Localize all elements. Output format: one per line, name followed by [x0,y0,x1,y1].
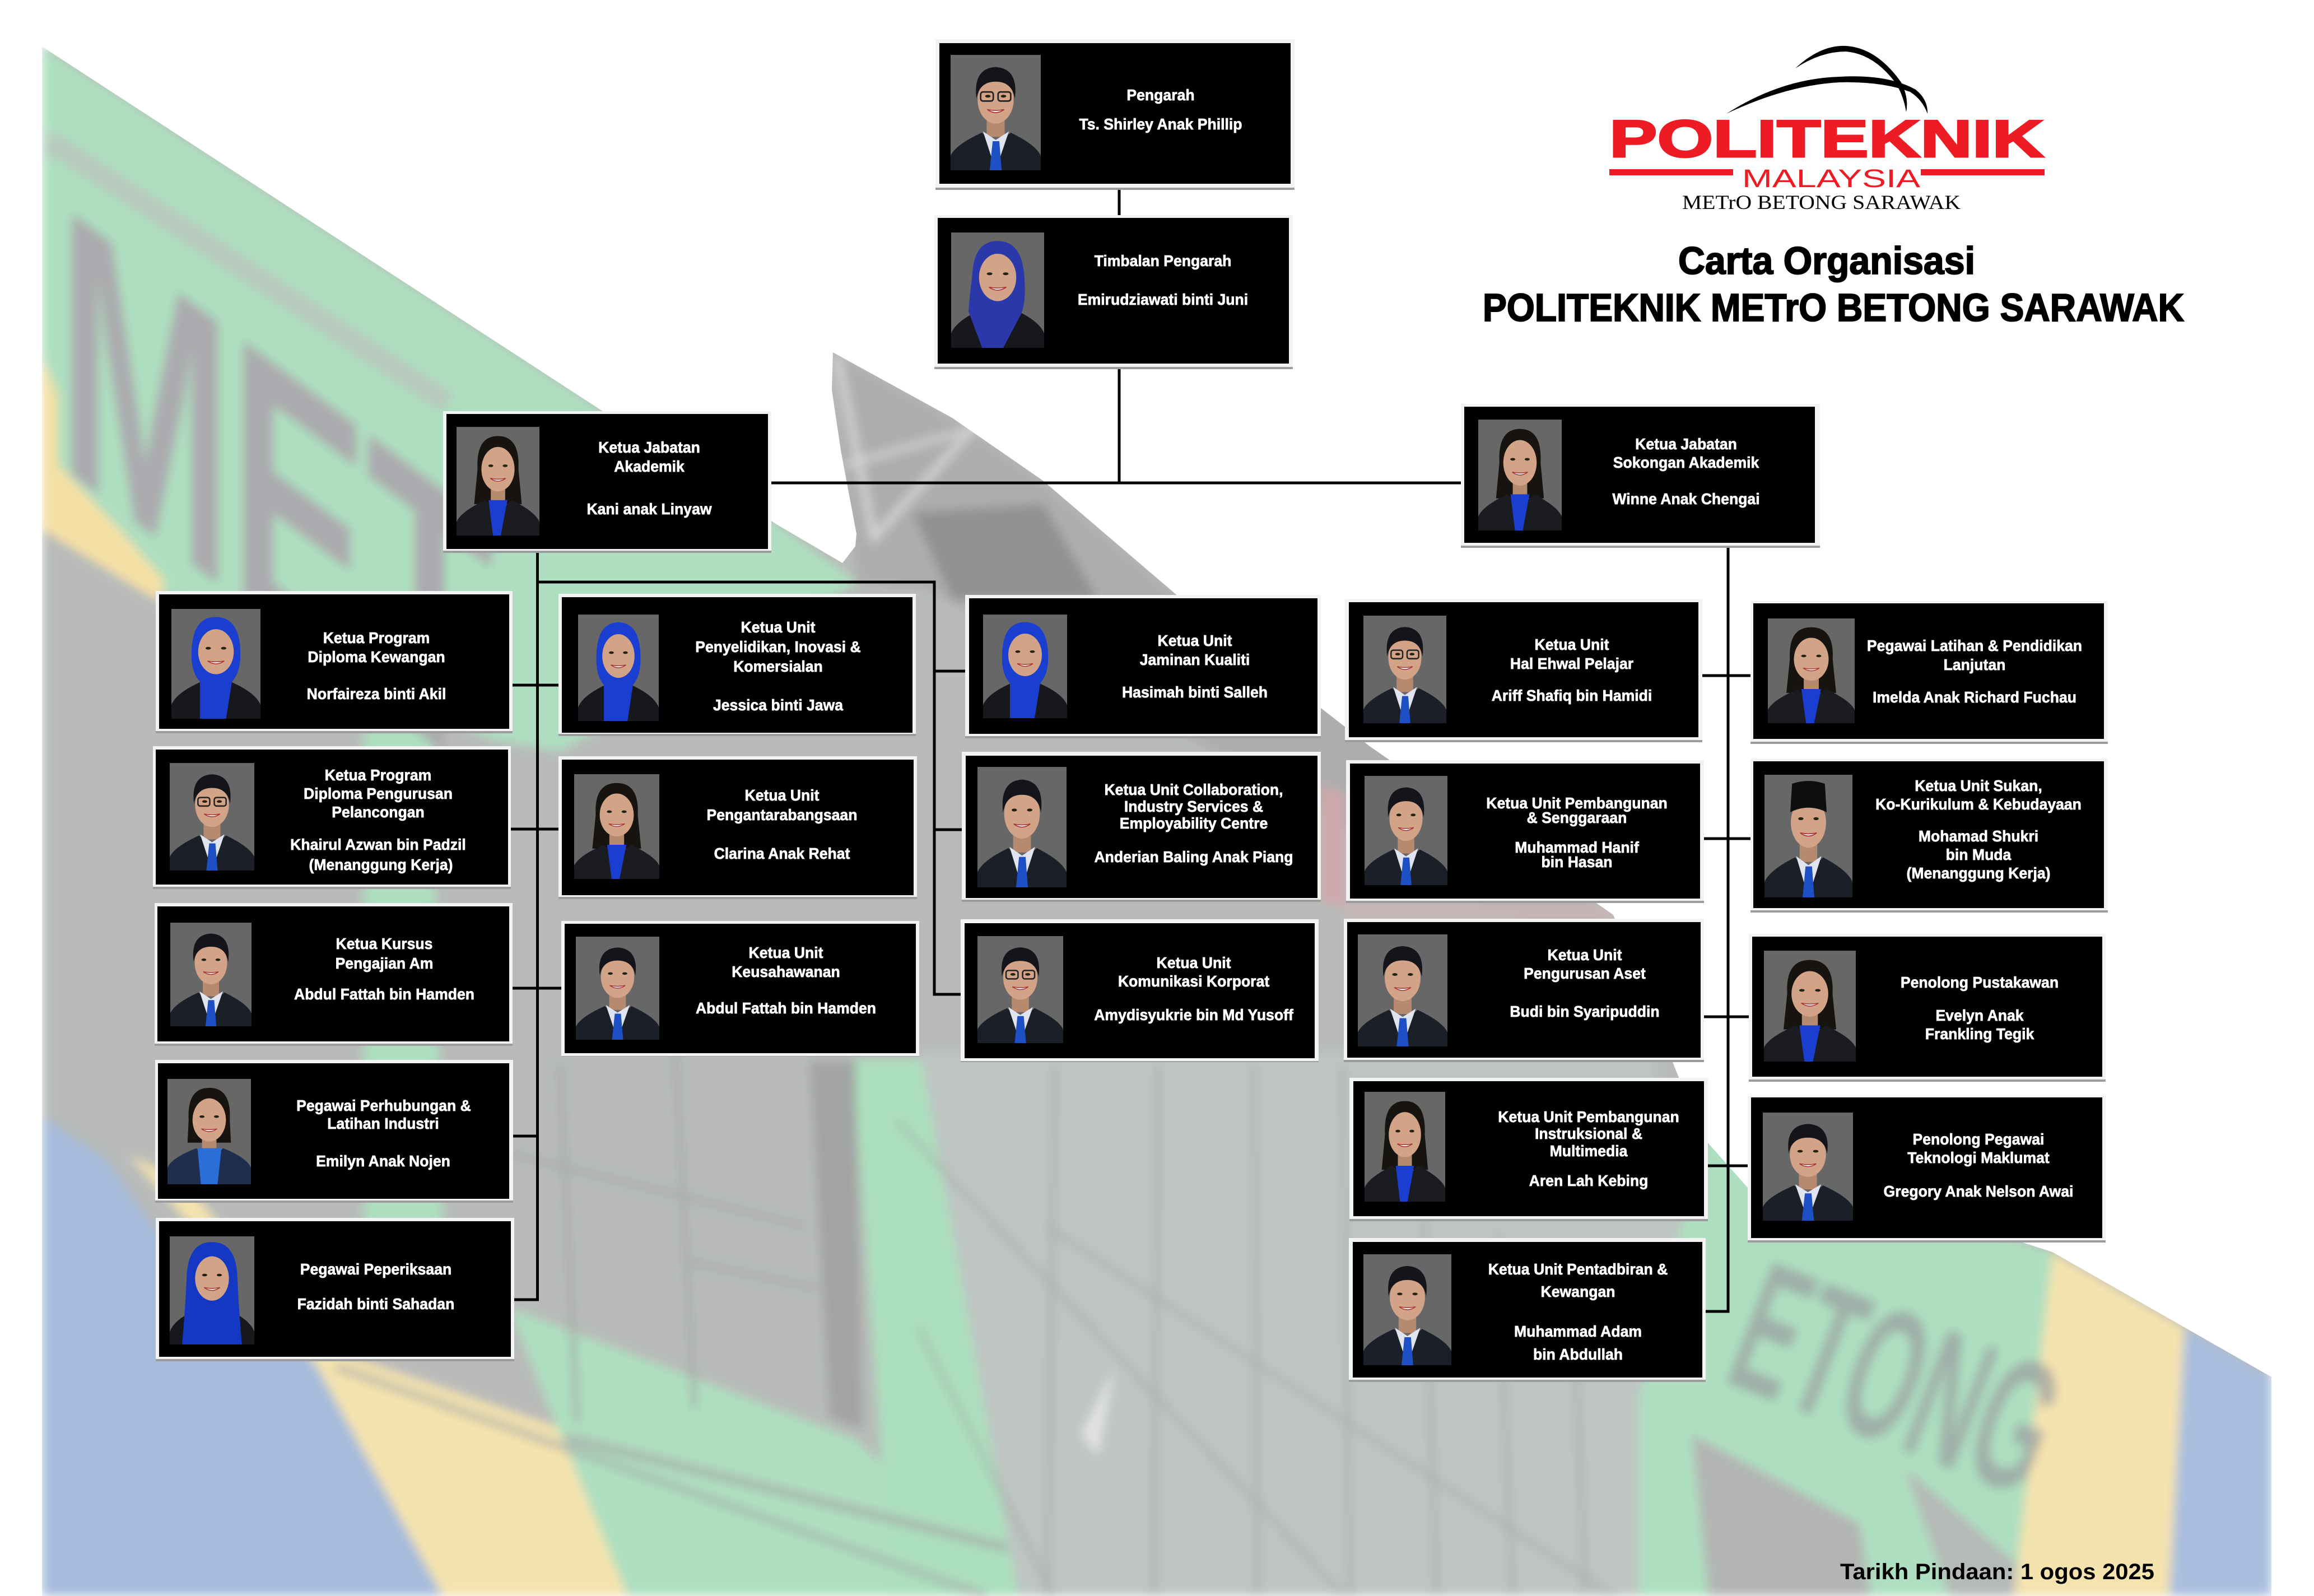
text: Ketua Unit Pembangunan & Senggaraan: bin Hasan [1541,853,1613,871]
text: Ketua Unit Pengurusan Aset: Pengurusan Aset [1524,964,1646,982]
text: Ketua Unit Penyelidikan: Jessica binti Jawa [713,696,844,714]
card: Pegawai Perhubungan & Latihan Industri [155,1060,513,1203]
photo: Imelda [1768,618,1855,723]
text: Ketua Unit Pembangunan Instruksional: Instruksional & [1535,1124,1642,1142]
text: Ketua Unit Pembangunan & Senggaraan: & Senggaraan [1527,808,1627,826]
text: Ketua Unit Komunikasi Korporat: Ketua Unit [1157,953,1231,971]
text: Pegawai Perhubungan [296,1096,471,1170]
card: Ketua Unit Komunikasi Korporat [961,919,1319,1062]
text: Timbalan Pengarah: Emirudziawati binti Juni [1078,290,1248,308]
photo: Hanif [1365,776,1447,885]
text: Ketua Unit Pembangunan Instruksional: Ketua Unit Pembangunan [1498,1108,1679,1125]
logo rule right [1921,169,2045,175]
logo campus name: METrO BETONG SARAWAK [1682,191,1961,213]
text: Ketua Program Pelancongan: Khairul Azwan bin Padzil [290,835,466,853]
card: Ketua Jabatan Sokongan Akademik [1461,404,1820,548]
photo: Abdul Fattah [170,923,252,1026]
text: Ketua Unit Pembangunan Instruksional: Multimedia [1550,1142,1628,1160]
text: Ketua Unit Jaminan Kualiti [1122,631,1268,701]
text: Ketua Program Diploma Kewangan [307,629,446,702]
text: Pengarah [1079,86,1242,133]
text: Penolong Pegawai Teknologi Maklumat [1884,1130,2073,1200]
text: Pegawai Peperiksaan [297,1260,454,1313]
text: Ketua Unit Collaboration: Industry Services & [1124,797,1263,815]
text: Penolong Pegawai Teknologi Maklumat: Penolong Pegawai [1913,1130,2044,1148]
photo: Amydisyukrie [977,936,1063,1043]
text: Penolong Pustakawan: Evelyn Anak [1935,1006,2024,1024]
text: Ketua Jabatan Akademik [586,438,712,518]
text: Ketua Jabatan Akademik: Akademik [614,457,685,475]
background lettering on the building, right: ETONG [1706,1222,2087,1535]
text: Pegawai Perhubungan: Pegawai Perhubungan & [296,1096,471,1114]
text: Pegawai Latihan & Pendidikan Lanjutan: Pegawai Latihan & Pendidikan [1867,636,2082,654]
text: Ketua Jabatan Akademik: Kani anak Linyaw [586,500,712,518]
text: Ketua Jabatan Sokongan Akademik [1612,435,1760,508]
card: Ketua Unit Pembangunan Instruksional [1349,1078,1708,1221]
text: Ketua Unit Hal Ehwal Pelajar: Ketua Unit [1535,635,1609,653]
logo subtitle: MALAYSIA [1742,164,1920,193]
text: Ketua Unit Hal Ehwal Pelajar: Ariff Shafiq bin Hamidi [1492,686,1652,704]
text: Ketua Unit Pembangunan & Senggaraan: Ketua Unit Pembangunan [1486,794,1668,812]
card: Ketua Unit Pentadbiran & Kewangan [1349,1238,1706,1382]
card: Ketua Unit Pembangunan & Senggaraan [1346,760,1704,903]
text: Ketua Jabatan Sokongan Akademik: Winne Anak Chengai [1612,490,1760,508]
logo rule left [1609,169,1733,175]
photo: Clarina [574,774,659,879]
text: Pegawai Latihan & Pendidikan Lanjutan [1867,636,2082,706]
card: Penolong Pustakawan [1749,934,2106,1082]
card: Ketua Program Diploma Pengurusan Pelancongan [153,746,511,889]
background lettering on the building: MET [58,119,493,870]
text: Ketua Program Pelancongan: Diploma Pengurusan [304,784,453,802]
photo: Anderian [977,767,1067,887]
text: Ketua Unit Penyelidikan: Komersialan [733,657,823,675]
photo: Emirudziawati [951,232,1044,348]
card: Ketua Unit Keusahawanan [561,921,919,1057]
text: Pegawai Perhubungan: Latihan Industri [327,1114,439,1132]
text: Ketua Unit Pentadbiran & Kewangan: Muhammad Adam [1514,1322,1642,1340]
text: Ketua Unit Pentadbiran & Kewangan: Kewangan [1541,1282,1615,1300]
text: Pegawai Latihan & Pendidikan Lanjutan: Lanjutan [1944,655,2005,673]
text: Ketua Unit Penyelidikan: Ketua Unit [741,618,815,636]
photo: Ariff [1363,616,1446,723]
photo: Evelyn [1764,951,1856,1062]
text: Timbalan Pengarah [1078,252,1248,308]
card: Ketua Unit Jaminan Kualiti [965,595,1321,738]
title line 2: POLITEKNIK METrO BETONG SARAWAK [1483,286,2184,329]
text: Ketua Unit Komunikasi Korporat [1094,953,1294,1023]
text: Ketua Unit Keusahawanan [696,943,876,1017]
text: Ketua Unit Komunikasi Korporat: Komunikasi Korporat [1118,972,1269,990]
text: Ketua Jabatan Sokongan Akademik: Sokongan Akademik [1613,453,1759,471]
text: Ketua Unit Sukan: (Menanggung Kerja) [1906,864,2051,882]
text: Ketua Unit Hal Ehwal Pelajar: Hal Ehwal Pelajar [1510,654,1633,672]
photo: Budi [1358,934,1447,1046]
text: Ketua Unit Pentadbiran & Kewangan [1488,1260,1668,1363]
photo: Fazidah [170,1236,254,1344]
text: Ketua Unit Keusahawanan: Abdul Fattah bin Hamden [696,999,876,1017]
text: Ketua Unit Sukan: bin Muda [1946,845,2012,863]
text: Penolong Pustakawan [1901,973,2059,1043]
card: Pegawai Latihan & Pendidikan Lanjutan [1750,601,2108,744]
text: Ketua Unit Pembangunan Instruksional: Aren Lah Kebing [1529,1171,1648,1189]
text: Ketua Program Diploma Kewangan: Norfaireza binti Akil [307,685,446,702]
text: Ketua Unit Collaboration [1094,780,1293,866]
text: Ketua Program Pelancongan: Ketua Program [325,766,431,784]
text: Ketua Kursus Pengajian Am [294,934,474,1003]
text: Ketua Program Pelancongan: Pelancongan [332,803,425,821]
text: Ketua Unit Jaminan Kualiti: Jaminan Kualiti [1140,650,1250,668]
connector lines [511,188,1754,1311]
photo: Jessica [578,615,659,721]
text: Ketua Program Diploma Kewangan: Diploma Kewangan [308,648,445,666]
text: Pegawai Peperiksaan: Pegawai Peperiksaan [300,1260,451,1278]
text: Penolong Pustakawan: Frankling Tegik [1925,1025,2034,1043]
card: Ketua Jabatan Akademik [443,411,771,553]
text: Ketua Kursus Pengajian Am: Pengajian Am [336,954,433,972]
card: Ketua Unit Collaboration [962,752,1321,902]
text: Ketua Unit Penyelidikan [695,618,861,714]
text: Ketua Unit Pengantarabangsaan: Clarina Anak Rehat [714,844,850,862]
text: Ketua Kursus Pengajian Am: Abdul Fattah bin Hamden [294,985,474,1003]
text: Ketua Unit Jaminan Kualiti: Hasimah binti Salleh [1122,683,1268,701]
text: Ketua Unit Sukan: Ketua Unit Sukan, [1915,776,2042,794]
card: Pegawai Peperiksaan [156,1218,514,1361]
text: Ketua Unit Pembangunan & Senggaraan: Muhammad Hanif [1515,838,1640,856]
text: Ketua Unit Jaminan Kualiti: Ketua Unit [1158,631,1232,649]
text: Ketua Unit Penyelidikan: Penyelidikan, Inovasi & [695,638,861,655]
text: Ketua Unit Pengantarabangsaan: Ketua Unit [745,786,819,804]
card: Ketua Kursus Pengajian Am [155,903,513,1046]
text: Ketua Program Pelancongan [290,766,466,873]
card: Ketua Unit Hal Ehwal Pelajar [1345,599,1702,742]
text: Ketua Jabatan Akademik: Ketua Jabatan [598,438,700,456]
text: Ketua Unit Collaboration: Anderian Baling Anak Piang [1094,848,1293,866]
card: Ketua Unit Pengantarabangsaan [558,756,917,899]
logo wordmark: POLITEKNIK [1609,109,2044,168]
photo: Kani [457,427,539,536]
title line 1: Carta Organisasi [1678,239,1975,282]
text: Ketua Unit Pengurusan Aset [1510,946,1660,1020]
card: Ketua Program Diploma Kewangan [156,591,513,733]
card: Pengarah [935,39,1295,190]
text: Ketua Unit Pengantarabangsaan [707,786,857,862]
photo: Khairul [170,763,254,871]
text: Ketua Program Pelancongan: (Menanggung Kerja) [309,855,453,873]
card: Ketua Unit Pengurusan Aset [1344,919,1704,1062]
text: Ketua Unit Keusahawanan: Ketua Unit [749,943,823,961]
text: Ketua Unit Collaboration: Ketua Unit Collaboration, [1104,780,1283,798]
text: Ketua Unit Pengantarabangsaan: Pengantarabangsaan [707,806,857,823]
text: Ketua Unit Pentadbiran & Kewangan: bin Abdullah [1533,1345,1623,1363]
card: Penolong Pegawai Teknologi Maklumat [1748,1096,2106,1243]
text: Timbalan Pengarah: Timbalan Pengarah [1095,252,1231,269]
card: Ketua Unit Sukan, Ko-Kurikulum & Kebudayaan [1750,759,2108,913]
text: Ketua Unit Pentadbiran & Kewangan: Ketua Unit Pentadbiran & [1488,1260,1668,1278]
text: Ketua Program Diploma Kewangan: Ketua Program [323,629,430,646]
photo: Shirley [951,55,1041,170]
revision date: Tarikh Pindaan: 1 ogos 2025 [1840,1560,2154,1584]
text: Ketua Unit Komunikasi Korporat: Amydisyukrie bin Md Yusoff [1094,1006,1294,1023]
text: Ketua Unit Sukan: Mohamad Shukri [1919,827,2038,845]
text: Ketua Unit Sukan: Ko-Kurikulum & Kebudayaan [1875,795,2082,813]
card: Ketua Unit Penyelidikan [558,594,916,736]
text: Penolong Pegawai Teknologi Maklumat: Gregory Anak Nelson Awai [1884,1182,2073,1200]
photo: Adam [1363,1254,1451,1365]
text: Penolong Pustakawan: Penolong Pustakawan [1901,973,2059,991]
card: Timbalan Pengarah [934,215,1293,369]
text: Pengarah: Pengarah [1126,86,1195,104]
photo: Hasimah [983,615,1067,718]
photo: Norfaireza [171,609,260,719]
text: Ketua Unit Hal Ehwal Pelajar [1492,635,1652,704]
text: Ketua Unit Pembangunan Instruksional [1498,1108,1679,1189]
text: Pegawai Perhubungan: Emilyn Anak Nojen [316,1152,450,1170]
logo [1609,46,2045,213]
text: Pegawai Peperiksaan: Fazidah binti Sahadan [297,1295,454,1313]
title [1483,239,2184,329]
text: Pegawai Latihan & Pendidikan Lanjutan: Imelda Anak Richard Fuchau [1873,688,2076,706]
text: Ketua Unit Collaboration: Employability Centre [1120,814,1268,832]
text: Ketua Unit Keusahawanan: Keusahawanan [732,962,840,980]
text: Ketua Jabatan Sokongan Akademik: Ketua Jabatan [1635,435,1737,453]
text: Ketua Unit Pengurusan Aset: Ketua Unit [1548,946,1622,964]
photo: Abdul Fattah [576,937,659,1040]
photo: Emilyn [167,1079,251,1184]
text: Ketua Kursus Pengajian Am: Ketua Kursus [336,934,432,952]
text: Ketua Unit Pengurusan Aset: Budi bin Syaripuddin [1510,1002,1660,1020]
text: Pengarah: Ts. Shirley Anak Phillip [1079,115,1242,133]
text: Ketua Unit Sukan [1875,776,2082,882]
photo: Winne [1478,420,1562,531]
text: Penolong Pegawai Teknologi Maklumat: Teknologi Maklumat [1907,1148,2050,1166]
photo: Aren [1365,1092,1445,1202]
text: Ketua Unit Pembangunan & Senggaraan [1486,794,1668,871]
photo: Shukri [1764,775,1852,897]
photo: Gregory [1763,1113,1853,1221]
logo swoosh [1726,46,1927,114]
